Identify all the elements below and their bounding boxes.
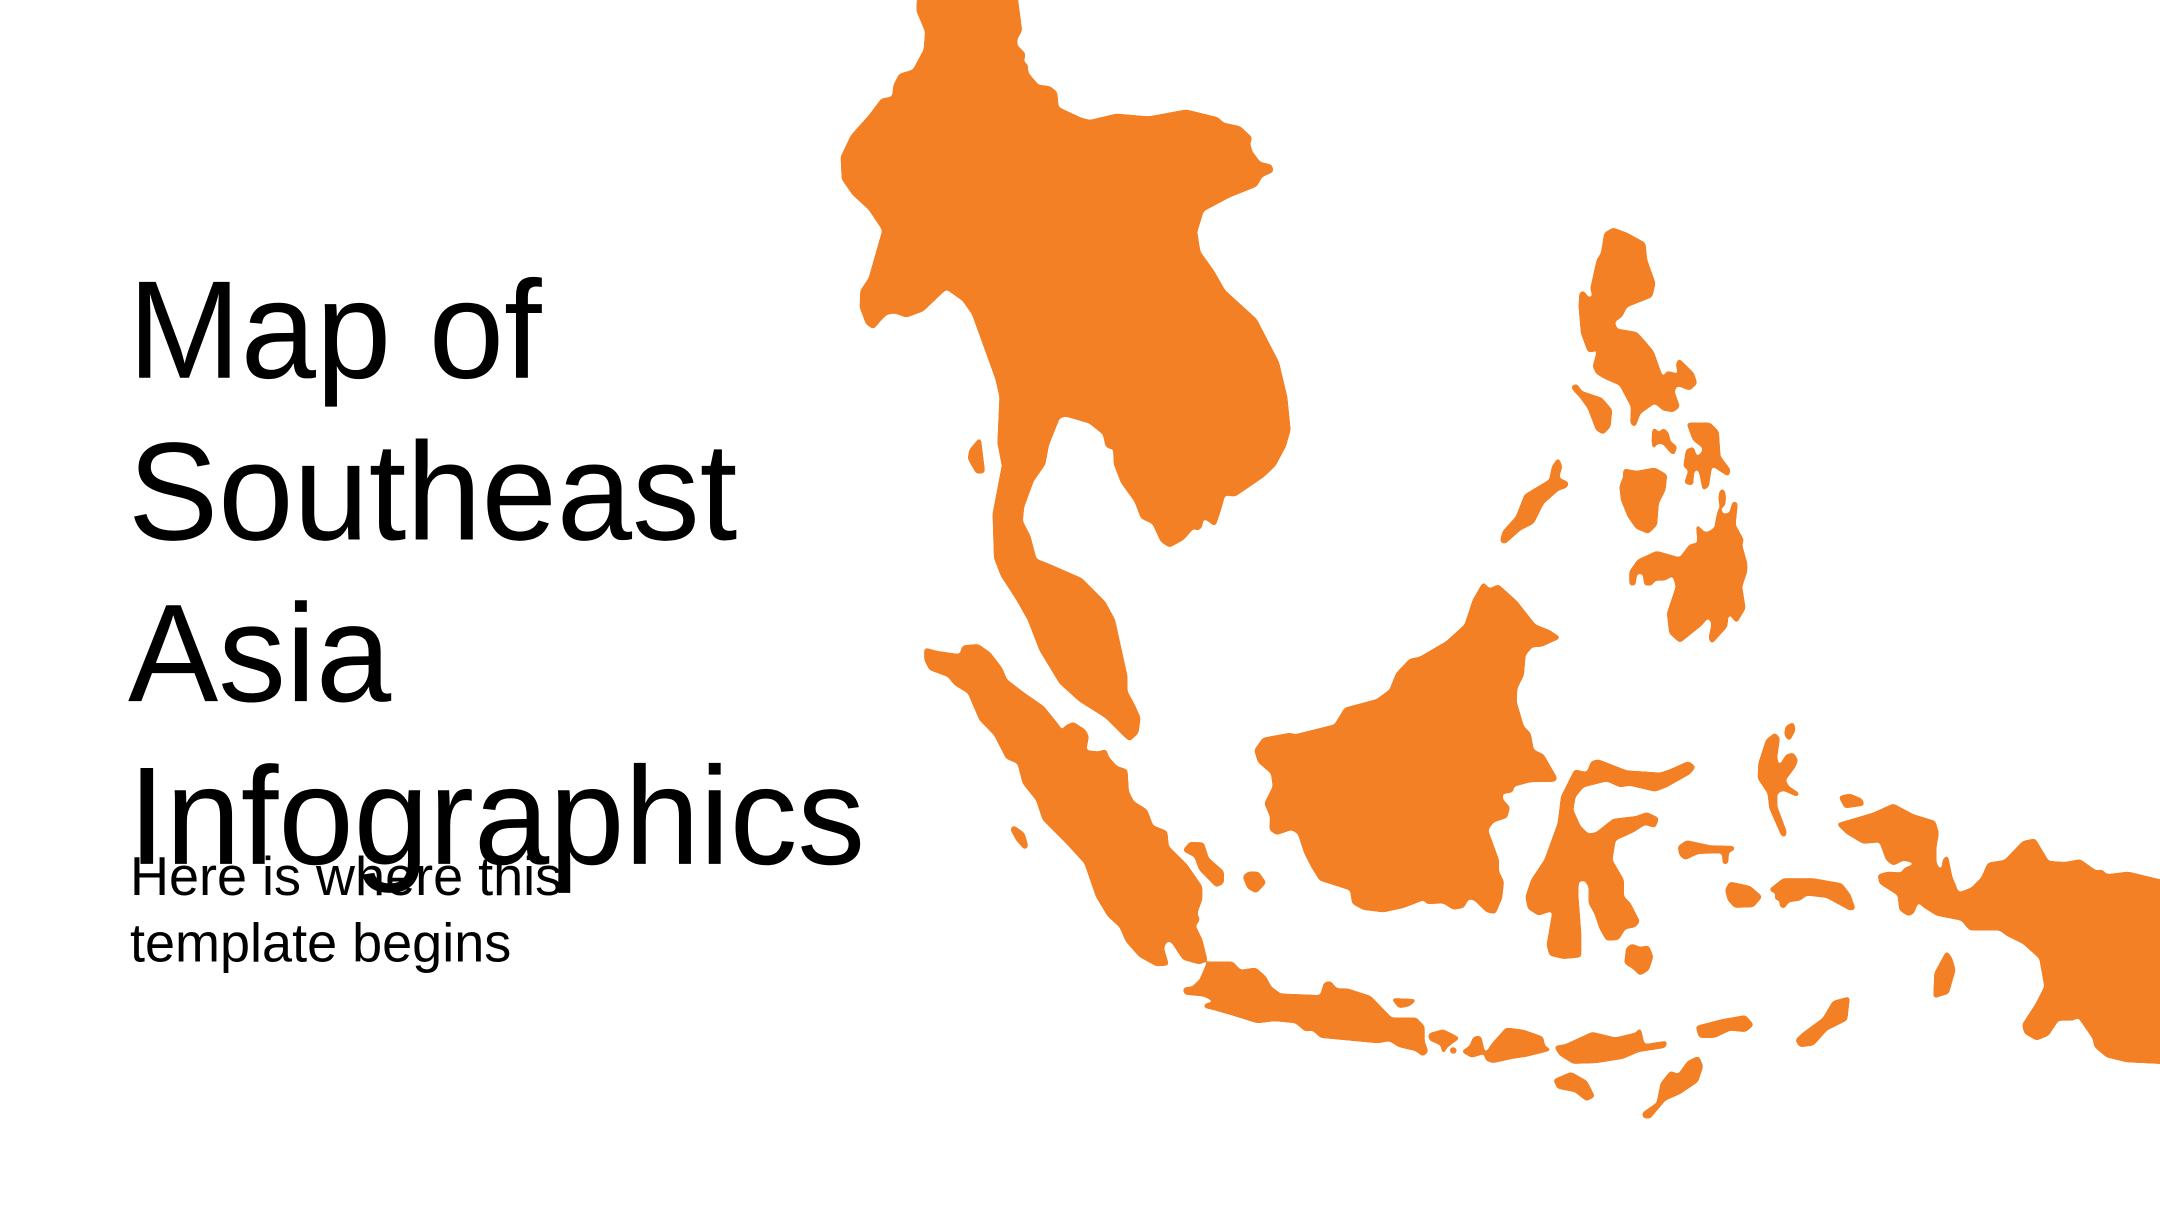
island: Buru: [1726, 882, 1762, 907]
island: Borneo: [1255, 583, 1560, 913]
island: Mindoro: [1572, 384, 1612, 434]
island: Waigeo: [1839, 794, 1864, 808]
island: Madura: [1392, 999, 1416, 1008]
island: Morotai: [1785, 723, 1795, 741]
island: Masbate: [1652, 428, 1676, 455]
island: Lombok: [1462, 1036, 1484, 1057]
title: [128, 252, 865, 893]
island: Palawan: [1501, 458, 1568, 543]
island: Java: [1184, 962, 1428, 1056]
island: Halmahera: [1758, 733, 1799, 837]
island: Dinagat: [1719, 489, 1725, 507]
island: Andaman: [968, 439, 984, 473]
island: Mindanao: [1630, 502, 1747, 643]
title: Infographics: [128, 737, 865, 893]
subtitle: Here is where this: [130, 846, 562, 907]
island: Seram: [1769, 879, 1855, 910]
title: Asia: [128, 575, 391, 731]
island: Buton: [1625, 944, 1653, 975]
island: Sumatra: [925, 645, 1207, 966]
island: Sumba: [1554, 1073, 1594, 1101]
landmass: mainland Southeast Asia: [841, 0, 1290, 741]
island: Nias: [1011, 826, 1028, 849]
island: Timor: [1643, 1057, 1703, 1118]
island: Aru: [1934, 952, 1955, 998]
island: Samar and Leyte: [1684, 423, 1730, 490]
title: Southeast: [128, 414, 737, 569]
island: New Guinea: [1837, 804, 2160, 1065]
island: Flores: [1555, 1028, 1667, 1063]
island: Luzon: [1579, 228, 1697, 427]
island: Tanimbar: [1796, 997, 1849, 1047]
subtitle: template begins: [130, 912, 511, 973]
title: Map of: [128, 252, 542, 407]
island: Nusa Penida: [1450, 1047, 1456, 1054]
island: Sumbawa: [1485, 1028, 1551, 1063]
island: Panay: [1620, 468, 1667, 533]
subtitle: [130, 846, 562, 973]
island: Bali: [1429, 1030, 1459, 1054]
island: Belitung: [1243, 872, 1266, 893]
island: Bangka: [1183, 843, 1223, 887]
island: Sula: [1678, 841, 1734, 864]
island: Sulawesi: [1526, 760, 1695, 958]
island: Wetar: [1696, 1016, 1753, 1037]
